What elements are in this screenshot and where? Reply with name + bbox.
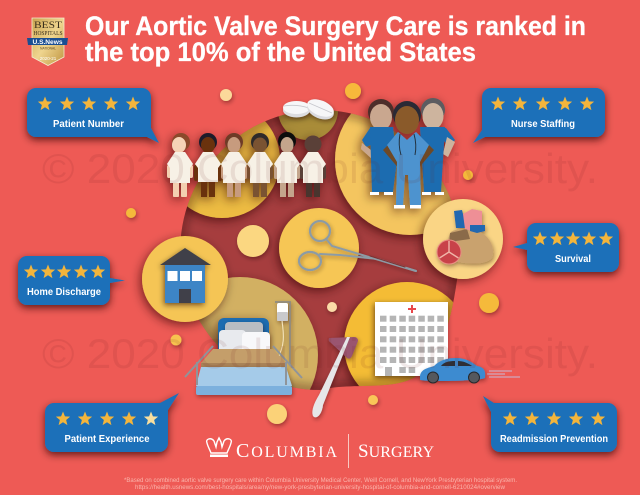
circle: pills backdrop (271, 110, 342, 148)
divider (348, 434, 349, 468)
watermark: © 2020 Columbia University. (42, 145, 598, 192)
pillows (219, 322, 270, 360)
callout: readmission prevention (483, 396, 617, 452)
blanket (201, 349, 286, 363)
circle: forceps (279, 208, 359, 288)
dot: inner pale (327, 302, 337, 312)
callout: home discharge (18, 256, 125, 305)
title (85, 11, 586, 67)
icon: forceps (299, 221, 416, 271)
stars (533, 232, 613, 245)
icon: reflex hammer (312, 337, 358, 417)
patient 6 (300, 136, 326, 197)
icon: car (420, 358, 520, 383)
nurse right (420, 98, 455, 195)
icon: pills (283, 96, 337, 123)
callout: survival (513, 223, 619, 272)
mattress (196, 367, 292, 395)
callout: nurse staffing (473, 88, 605, 143)
stars (38, 96, 140, 110)
headboard (218, 318, 269, 358)
label: Survival (555, 254, 591, 265)
label: Patient Experience (64, 434, 150, 445)
label: Readmission Prevention (500, 434, 608, 445)
title: the top 10% of the United States (85, 37, 476, 67)
circle: heart (423, 199, 503, 279)
label: Patient Number (53, 119, 124, 130)
decorative dots (126, 83, 499, 424)
badge: best hospitals: 2020-21 (40, 56, 57, 61)
central red blob (180, 110, 460, 390)
blob contents (181, 110, 458, 390)
patient 4 (247, 133, 273, 197)
nurse left (361, 99, 397, 195)
circle: home (142, 236, 228, 322)
badge: best hospitals: BEST (34, 21, 62, 31)
icon: hospital building (375, 302, 448, 376)
inner blob shadow (180, 110, 460, 390)
circle: patients (184, 120, 281, 228)
icon: crown (207, 438, 231, 457)
circle: hospital (336, 278, 454, 386)
nurse center (383, 101, 434, 208)
stars (491, 96, 594, 110)
footnote: *Based on combined aortic valve surgery care within Columbia University Medical Center, Weill Cornell, and NewYork Presbyterian hospital system. (124, 477, 517, 484)
stars (503, 412, 605, 425)
circle: pale (237, 225, 269, 257)
rails (185, 346, 302, 385)
badge: best hospitals: HOSPITALS (34, 30, 63, 37)
patient 1 (167, 133, 193, 197)
label: Home Discharge (27, 287, 101, 298)
label: Nurse Staffing (511, 119, 575, 130)
footnote (124, 477, 517, 491)
badge: best hospitals: NATIONAL (40, 46, 56, 50)
stars (24, 264, 105, 278)
badge: best hospitals: U.S.News (32, 39, 63, 46)
circle: nurses (326, 112, 452, 244)
badge: best hospitals (27, 18, 68, 66)
callout: patient experience (45, 393, 179, 452)
patient 5 (274, 132, 300, 197)
icon: bed with IV (185, 302, 302, 395)
logo: columbia surgery (207, 434, 434, 468)
title: Our Aortic Valve Surgery Care is ranked in (85, 11, 586, 41)
icon: patients group (167, 132, 326, 197)
patient 2 (195, 133, 221, 197)
sub-brand: SURGERY (358, 441, 434, 462)
patient 3 (221, 133, 247, 197)
watermark (42, 145, 598, 377)
icon: heart and valve (437, 209, 493, 264)
callout: patient number (27, 88, 159, 143)
icon: house (160, 248, 211, 303)
watermark: © 2020 Columbia University. (42, 330, 598, 377)
iv pole and bag (275, 302, 290, 365)
icon: nurses group (361, 98, 455, 208)
circle: bed (199, 274, 322, 390)
wordmark: COLUMBIA (236, 440, 337, 462)
stars (56, 412, 158, 425)
footnote: https://health.usnews.com/best-hospitals/area/ny/new-york-presbyterian-university-hospital-of-columbia-and-cornell-6210024#overview (135, 484, 505, 491)
